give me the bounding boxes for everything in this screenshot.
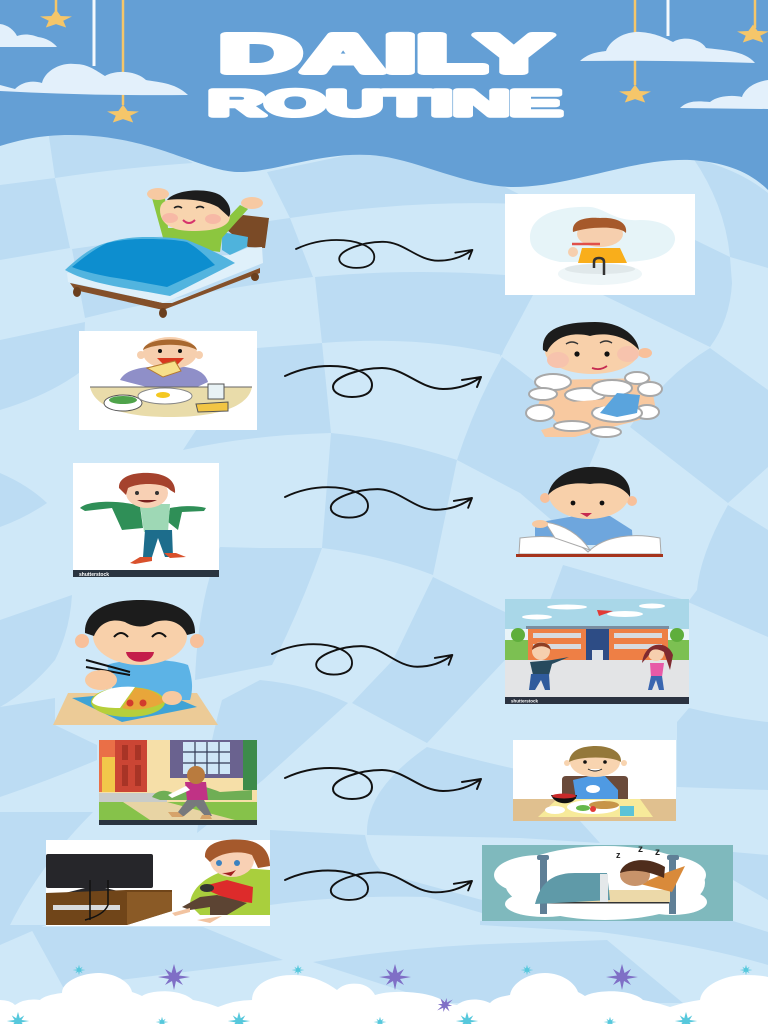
- arrow 1: [296, 240, 472, 268]
- image: boy sleeping in bed: z: [638, 844, 643, 855]
- arrow 3: [285, 487, 472, 518]
- image: boy sleeping in bed: [482, 844, 733, 921]
- image: putting on jacket: shutterstock: [79, 572, 109, 578]
- illustration: boy reading book: [516, 467, 663, 557]
- image: school with two children: shutterstock: [511, 698, 539, 704]
- decoration: hanging clouds and stars: [0, 0, 768, 122]
- image: eating lunch at table: [513, 740, 676, 821]
- image: walking to school: [99, 740, 257, 825]
- arrow 6: [285, 870, 472, 900]
- image: boy sleeping in bed: z: [655, 847, 660, 858]
- header banner: [0, 0, 768, 190]
- arrow 2: [285, 366, 481, 397]
- image: putting on jacket: [73, 463, 219, 578]
- image: playing video game: [46, 840, 270, 926]
- image: brushing teeth: [505, 194, 695, 295]
- arrow 4: [272, 644, 452, 675]
- title: ROUTINE: [208, 82, 562, 124]
- title: DAILY: [219, 24, 552, 84]
- image: eating breakfast: [79, 331, 257, 430]
- footer: clouds and sparkles: [0, 964, 768, 1024]
- illustration: boy eating bento: [53, 600, 218, 725]
- image: boy sleeping in bed: z: [616, 850, 621, 860]
- title: [208, 24, 562, 124]
- illustration: boy waking up in bed: [65, 188, 269, 318]
- arrow 5: [285, 768, 481, 799]
- image: school with two children: [505, 599, 689, 704]
- illustration: boy washing in foam: [526, 322, 662, 437]
